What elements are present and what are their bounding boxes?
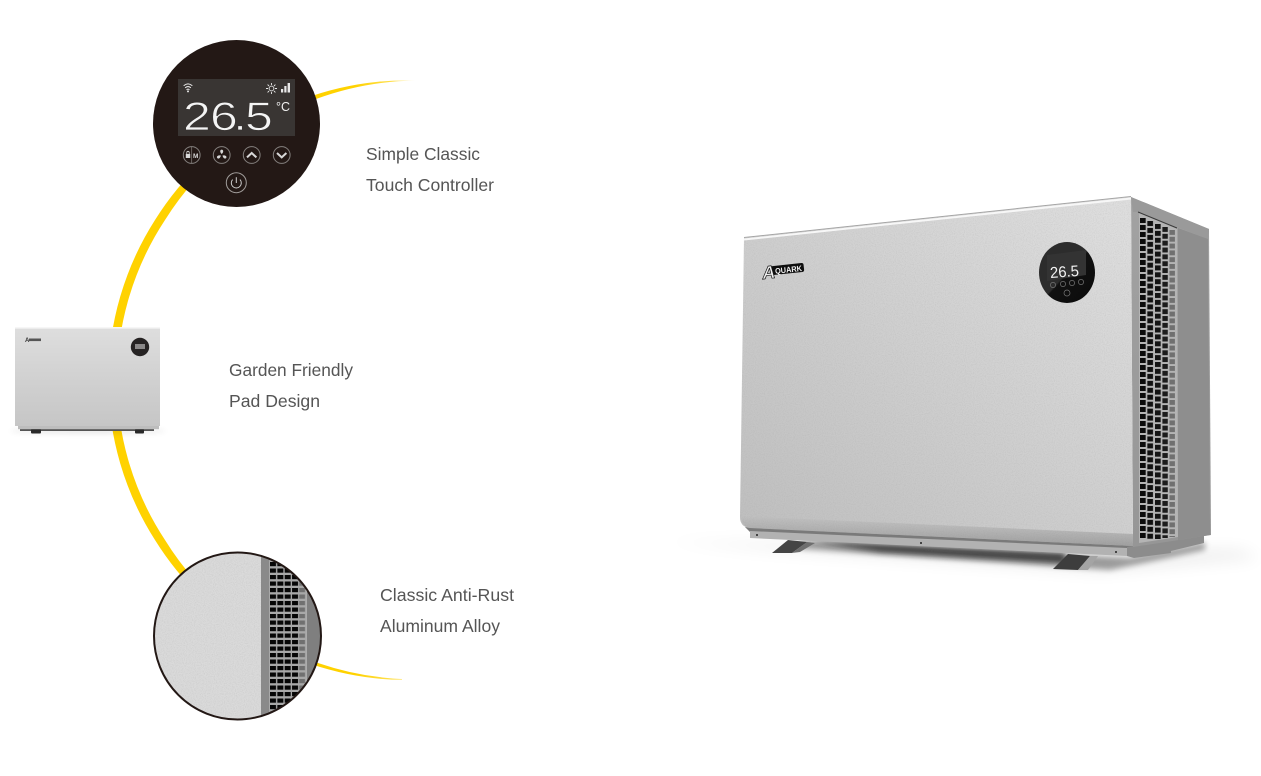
label: aluminum alloy [380, 585, 514, 636]
side rear panel [1178, 228, 1210, 540]
label: aluminum alloy: Aluminum Alloy [380, 616, 500, 636]
mounting feet [772, 540, 1098, 570]
controller body [1039, 242, 1095, 303]
front panel grain [738, 195, 1136, 550]
label: touch controller [366, 144, 494, 195]
button: down [273, 147, 290, 163]
detail circle outline [154, 552, 321, 720]
brand logo: QUARK [775, 264, 803, 276]
label: aluminum alloy: Classic Anti-Rust [380, 585, 514, 605]
button: power [226, 173, 246, 193]
small unit logo: A [25, 338, 30, 344]
label: pad design [229, 360, 353, 411]
controller circle background [153, 40, 320, 207]
brand logo [760, 259, 805, 283]
base rail [745, 527, 1210, 558]
button: lock and mode: M [193, 153, 198, 160]
callout: small pad-mounted unit [10, 327, 166, 434]
brand logo: A [760, 262, 776, 283]
front panel lower shade [741, 516, 1133, 546]
button: up [243, 147, 260, 163]
floor shadow [660, 540, 1261, 572]
label: pad design: Garden Friendly [229, 360, 353, 380]
front panel top edge [744, 196, 1131, 240]
small unit logo [25, 338, 41, 344]
label: touch controller: Touch Controller [366, 175, 494, 195]
controller reading: 26.5 [1049, 263, 1080, 282]
detail contents [155, 554, 320, 718]
callout: touch controller [153, 40, 320, 207]
small unit body [15, 327, 160, 426]
main unit controller [1039, 242, 1095, 303]
small unit base rail [18, 426, 159, 429]
side top band [1131, 197, 1209, 239]
label: pad design: Pad Design [229, 391, 320, 411]
small unit controller [131, 338, 149, 356]
temperature unit: °C [276, 100, 290, 114]
callout: aluminum alloy detail [150, 550, 325, 725]
small unit underside [20, 429, 154, 431]
icon: signal bars [281, 83, 290, 92]
controller screen [178, 79, 295, 139]
front panel [740, 197, 1133, 546]
controller screen [1047, 250, 1086, 281]
side panel [1131, 197, 1211, 547]
temperature reading: 26.5 [183, 94, 273, 139]
small unit shadow [10, 428, 166, 434]
label: touch controller: Simple Classic [366, 144, 480, 164]
button: fan [213, 147, 230, 163]
controller buttons [1050, 279, 1084, 296]
small unit top edge [15, 327, 160, 329]
icon: sun [266, 83, 277, 94]
button: lock and mode [183, 147, 200, 163]
icon: wifi [184, 84, 192, 92]
grille section [1138, 212, 1178, 543]
yellow connecting arc [108, 80, 417, 680]
small unit feet [31, 429, 144, 434]
main product: heat pump [740, 196, 1234, 575]
